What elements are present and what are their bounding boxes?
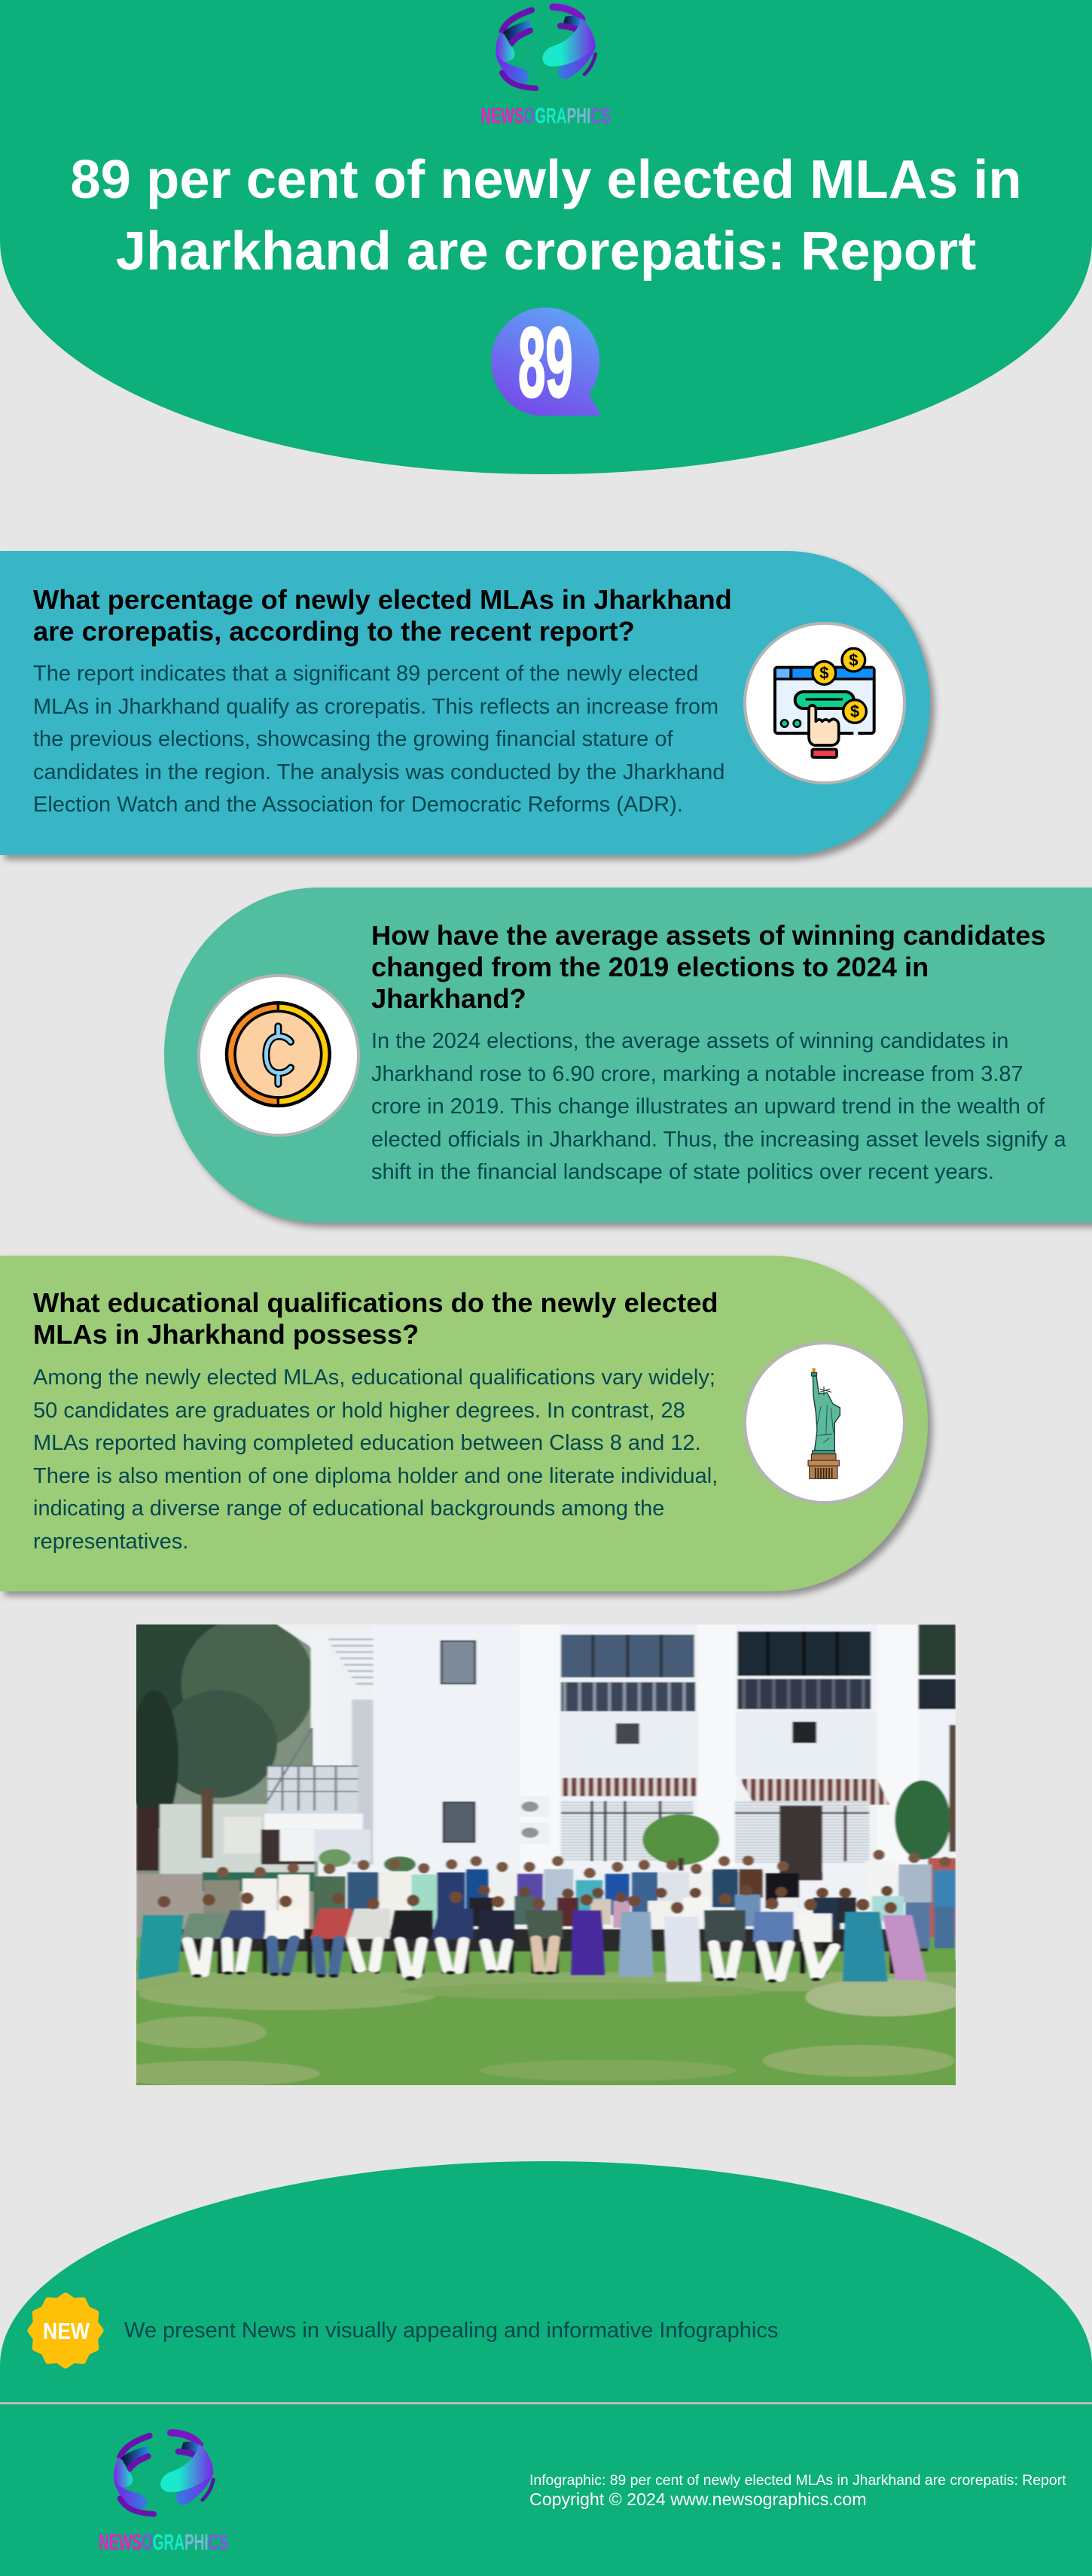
divider <box>0 2402 1092 2404</box>
heading: crorepati percentage <box>33 584 732 646</box>
icon circle: coin <box>197 974 360 1137</box>
photo: newly elected MLAs group photo <box>136 1624 956 2085</box>
icon: Newsographics logo <box>480 3 611 128</box>
seated row torsos <box>137 1909 927 1981</box>
text block: average assets: crore in 2019. This change illustrates an upward trend in the wealth of <box>371 1095 1045 1119</box>
icon: 89 speech bubble <box>491 307 600 418</box>
text block: average assets <box>371 1029 1066 1184</box>
standing row <box>203 1861 956 1948</box>
title: Jharkhand are crorepatis: Report <box>116 220 976 282</box>
icon: 89 speech bubble: 89 <box>518 307 573 418</box>
text block: average assets: shift in the financial landscape of state politics over recent years. <box>371 1160 994 1184</box>
icon: money browser <box>773 647 876 759</box>
footer copyright line: Copyright © 2024 www.newsographics.com <box>529 2489 867 2509</box>
icon: footer Newsographics logo: NEWSOGRAPHICS <box>99 2530 228 2555</box>
text block: crorepati percentage <box>33 662 724 817</box>
header panel <box>0 0 1092 474</box>
text block: educational qualifications: indicating a diverse range of educational backgrounds among the <box>33 1497 664 1521</box>
icon: footer Newsographics logo <box>99 2429 228 2555</box>
heading: average assets: Jharkhand? <box>371 983 526 1013</box>
chairs <box>178 1929 928 1951</box>
footer panel <box>0 2161 1092 2576</box>
text block: crorepati percentage: Election Watch and the Association for Democratic Reforms (ADR). <box>33 793 683 817</box>
text block: crorepati percentage: The report indicates that a significant 89 percent of the newly elected <box>33 662 698 686</box>
text block: educational qualifications: representatives. <box>33 1530 188 1554</box>
title: 89 per cent of newly elected MLAs in <box>70 149 1022 209</box>
icon: coin <box>224 1001 331 1108</box>
heading: educational qualifications: MLAs in Jharkhand possess? <box>33 1319 419 1349</box>
icon: Newsographics logo: NEWSOGRAPHICS <box>480 104 611 128</box>
text block: crorepati percentage: candidates in the region. The analysis was conducted by the Jharkhand <box>33 760 724 784</box>
icon: money browser: $ <box>849 650 858 669</box>
panel: educational qualifications <box>0 1256 928 1591</box>
panel: crorepati percentage <box>0 551 930 855</box>
text block: educational qualifications: MLAs reported having completed education between Class 8 and 12. <box>33 1431 701 1455</box>
building <box>374 1624 956 1871</box>
tree and background <box>136 1624 318 1878</box>
title <box>70 149 1022 282</box>
text block: crorepati percentage: the previous elections, showcasing the growing financial stature of <box>33 727 673 751</box>
icon circle: money browser <box>743 622 906 784</box>
panel: average assets <box>164 888 1092 1223</box>
text block: crorepati percentage: MLAs in Jharkhand qualify as crorepatis. This reflects an increase from <box>33 694 718 718</box>
footer source line: Infographic: 89 per cent of newly elected MLAs in Jharkhand are crorepatis: Report <box>529 2472 1066 2489</box>
heading: average assets <box>371 920 1046 1013</box>
text block: educational qualifications <box>33 1366 718 1554</box>
heading: crorepati percentage: are crorepatis, according to the recent report? <box>33 616 635 646</box>
heading: average assets: How have the average assets of winning candidates <box>371 920 1046 950</box>
heading: average assets: changed from the 2019 elections to 2024 in <box>371 952 929 982</box>
icon: money browser: $ <box>850 702 859 721</box>
text: NEW <box>43 2318 90 2344</box>
shoes <box>192 1969 821 1983</box>
staircase <box>277 1624 376 1700</box>
text block: educational qualifications: 50 candidates are graduates or hold higher degrees. In contrast, 28 <box>33 1399 685 1423</box>
text block: educational qualifications: Among the newly elected MLAs, educational qualifications vary widely; <box>33 1366 715 1390</box>
heading: educational qualifications: What educational qualifications do the newly elected <box>33 1287 718 1317</box>
plants <box>642 1814 719 1865</box>
heading: crorepati percentage: What percentage of newly elected MLAs in Jharkhand <box>33 584 732 614</box>
windows <box>561 1634 694 1677</box>
icon circle: statue <box>743 1341 906 1504</box>
text block: average assets: elected officials in Jharkhand. Thus, the increasing asset levels signify a <box>371 1128 1066 1152</box>
awnings <box>561 1778 697 1796</box>
ground floor <box>561 1801 693 1861</box>
pathway and lawn <box>136 1874 318 1947</box>
AC units <box>520 1796 549 1816</box>
heading: educational qualifications <box>33 1287 718 1349</box>
text block: average assets: In the 2024 elections, the average assets of winning candidates in <box>371 1029 1008 1053</box>
tagline: We present News in visually appealing and informative Infographics <box>124 2319 778 2343</box>
middle row <box>469 1895 904 1929</box>
text block: educational qualifications: There is also mention of one diploma holder and one literate individual, <box>33 1463 718 1487</box>
icon: NEW badge <box>27 2292 104 2369</box>
text block: average assets: Jharkhand rose to 6.90 crore, marking a notable increase from 3.87 <box>371 1061 1023 1086</box>
icon: statue of liberty <box>807 1368 840 1479</box>
seated row legs <box>188 1939 834 1978</box>
icon: money browser: $ <box>819 664 828 683</box>
